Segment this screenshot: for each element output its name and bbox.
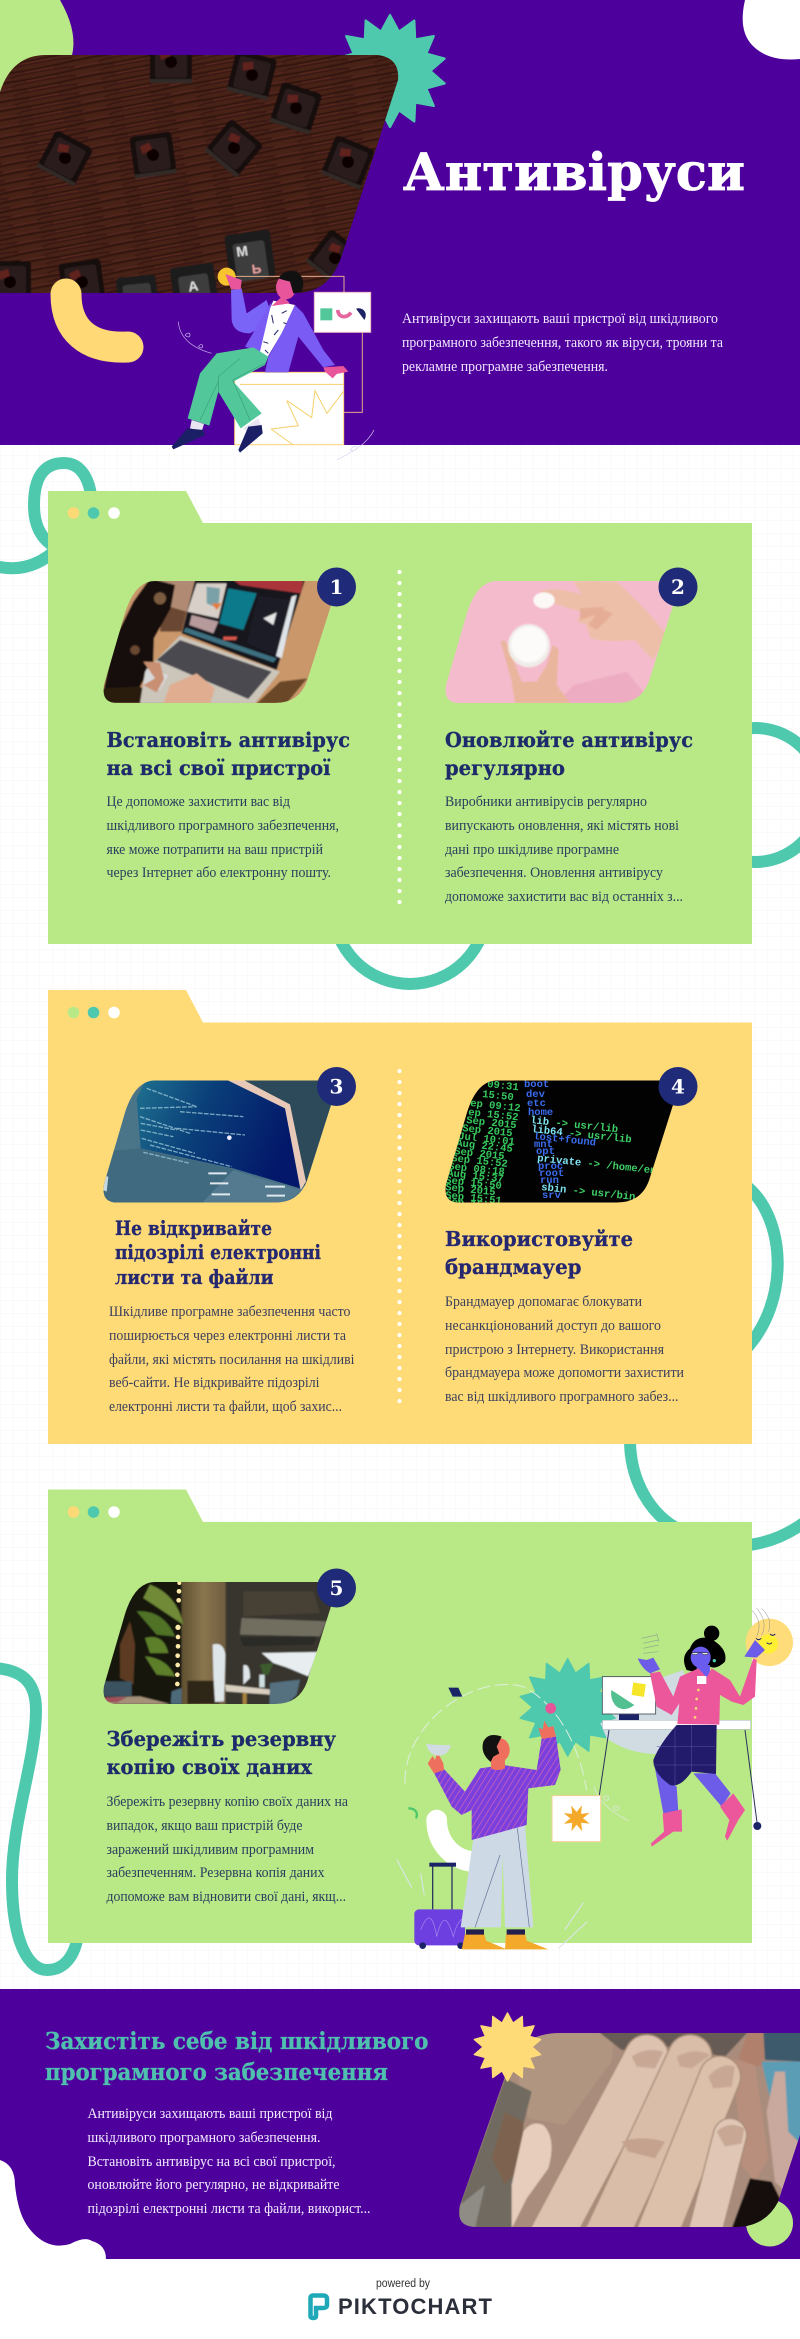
footer text: оновлюйте його регулярно, не відкривайте <box>88 2177 340 2193</box>
intro text <box>402 311 723 375</box>
photo: terminal: Sep 15:30 <box>445 1196 502 1214</box>
badge 3 <box>317 1067 356 1106</box>
text 2 <box>445 794 683 905</box>
star <box>520 1659 615 1756</box>
footer heading: Захистіть себе від шкідливого <box>45 2028 428 2055</box>
photo: laptop <box>100 578 340 705</box>
text 2: допоможе захистити вас від останніх з... <box>445 889 683 905</box>
badge 2 <box>658 568 698 606</box>
photo: hand on face <box>455 2032 800 2238</box>
window dots <box>68 507 120 519</box>
icon: teal star <box>335 15 445 127</box>
heading 3: листи та файли <box>115 1266 274 1289</box>
heading 3 <box>115 1217 321 1289</box>
heading 1 <box>106 728 350 780</box>
text 1: Це допоможе захистити вас від <box>106 794 290 810</box>
decorative teal rings <box>0 463 800 1970</box>
text 2: Виробники антивірусів регулярно <box>445 794 647 810</box>
illustration: two people at desk <box>397 1608 793 1949</box>
badge 4: 4 <box>671 1074 685 1098</box>
photo: terminal: root <box>539 1168 564 1180</box>
heading 1: на всі свої пристрої <box>106 756 331 780</box>
photo: terminal: run <box>540 1175 559 1187</box>
photo: terminal: dev <box>526 1089 546 1101</box>
heading 2: регулярно <box>445 756 565 780</box>
picture card <box>552 1796 601 1842</box>
woman <box>638 1626 765 1847</box>
photo: terminal: mnt <box>534 1139 553 1151</box>
motion lines <box>397 1859 587 1948</box>
heading 4 <box>445 1227 633 1279</box>
photo: terminal: Sep 2015 <box>466 1115 517 1132</box>
badge 1 <box>317 568 356 606</box>
head <box>272 292 290 306</box>
photo: terminal: lib64 -> usr/lib <box>531 1124 632 1147</box>
footer heading <box>45 2028 428 2086</box>
photo: terminal: home <box>528 1107 553 1119</box>
icon: yellow star <box>474 2013 541 2081</box>
photo: terminal: opt <box>536 1146 555 1158</box>
white footer strip <box>0 2259 800 2339</box>
heading 2: Оновлюйте антивірус <box>445 728 693 752</box>
intro text: рекламне програмне забезпечення. <box>402 359 608 375</box>
dashed arc <box>405 1684 587 1790</box>
text 5 <box>106 1794 348 1905</box>
footer banner <box>0 1989 800 2259</box>
photo: terminal: etc <box>527 1098 546 1110</box>
heading 5: Збережіть резервну <box>106 1727 336 1751</box>
card 2 <box>48 990 752 1444</box>
badge 5: 5 <box>330 1576 343 1600</box>
monitor and desk <box>599 1677 761 1830</box>
heading 3: підозрілі електронні <box>115 1241 321 1264</box>
photo: code screen <box>100 1078 340 1205</box>
photo: terminal: Sep 15:52 <box>451 1153 508 1171</box>
grey blob <box>583 1670 690 1754</box>
powered by label: powered by <box>376 2278 430 2290</box>
photo: terminal: ep 09:12 <box>470 1098 521 1115</box>
text 2: забезпечення. Оновлення антивірусу <box>445 865 663 881</box>
photo: terminal: 15:50 <box>482 1089 514 1104</box>
jacket <box>245 302 335 372</box>
arm <box>231 288 273 333</box>
heading 1: Встановіть антивірус <box>106 728 350 752</box>
window dots <box>68 1007 120 1018</box>
photo: terminal: ep 15:52 <box>468 1107 519 1124</box>
footer text: шкідливого програмного забезпечення. <box>88 2130 320 2146</box>
icon: piktochart logo <box>310 2296 327 2318</box>
text 3 <box>109 1304 354 1415</box>
title: Антивіруси <box>403 143 745 203</box>
window dots <box>68 1506 120 1518</box>
socks and shoes <box>190 418 261 433</box>
text 3: файли, які містять посилання на шкідливі <box>109 1352 354 1368</box>
photo: terminal <box>446 1080 673 1202</box>
photo: terminal: private -> /home/encr <box>537 1153 669 1179</box>
card 1 <box>48 491 752 944</box>
text 4: вас від шкідливого програмного забез... <box>445 1389 678 1405</box>
text 3: Шкідливе програмне забезпечення часто <box>109 1304 350 1320</box>
man <box>426 1703 561 1949</box>
footer text: Антивіруси захищають ваші пристрої від <box>88 2106 333 2122</box>
text 4: пристрою з Інтернету. Використання <box>445 1342 664 1358</box>
text 3: веб-сайти. Не відкривайте підозрілі <box>109 1375 320 1391</box>
badge 2: 2 <box>671 575 685 599</box>
badge 1: 1 <box>330 575 343 599</box>
text 5: заражений шкідливим програмним <box>106 1842 314 1858</box>
photo: terminal: Sep 15:50 <box>445 1175 502 1193</box>
photo: terminal: boot <box>524 1079 549 1091</box>
yellow C shape <box>66 294 128 347</box>
connector lines <box>233 276 362 412</box>
photo: terminal: srv <box>542 1190 562 1202</box>
sign card <box>314 292 371 332</box>
heading 3: Не відкривайте <box>115 1217 272 1240</box>
heading 4: Використовуйте <box>445 1227 633 1251</box>
white box <box>235 372 344 445</box>
blob: green top left <box>0 0 73 100</box>
photo: terminal: proc <box>538 1161 563 1173</box>
badge 5 <box>317 1568 356 1608</box>
intro text: програмного забезпечення, такого як віруси, трояни та <box>402 335 723 351</box>
heading 2 <box>445 728 693 780</box>
heading 5: копію своїх даних <box>106 1755 313 1779</box>
text 3: електронні листи та файли, щоб захис... <box>109 1399 342 1415</box>
photo: terminal: lost+found <box>533 1131 597 1150</box>
photo: terminal: Aug 15:37 <box>447 1168 504 1186</box>
photo: keyboard keys on wood: M <box>235 242 249 260</box>
text 4 <box>445 1294 684 1405</box>
heading 5 <box>106 1727 336 1779</box>
text 3: поширюється через електронні листи та <box>109 1328 346 1344</box>
suitcase <box>414 1863 465 1949</box>
photo: terminal: Sep 15:51 <box>445 1190 502 1208</box>
text 5: випадок, якщо ваш пристрій буде <box>106 1818 303 1834</box>
badge 4 <box>658 1067 698 1106</box>
badge 3: 3 <box>330 1074 343 1098</box>
intro text: Антивіруси захищають ваші пристрої від шкідливого <box>402 311 718 327</box>
smiling sun <box>746 1608 793 1666</box>
card 3 <box>48 1490 752 1943</box>
squiggles <box>178 322 212 353</box>
photo: terminal: Aug 22:45 <box>456 1138 513 1156</box>
footer text: підозрілі електронні листи та файли, використ... <box>88 2201 370 2217</box>
photo: terminal: Sep 2015 <box>454 1146 505 1163</box>
heading 4: брандмауер <box>445 1255 582 1279</box>
photo: terminal: Sep 2015 <box>445 1182 496 1199</box>
footer text <box>88 2106 370 2217</box>
dotted divider <box>398 572 402 904</box>
photo: terminal: Sep 2015 <box>462 1123 513 1140</box>
text 1: яке може потрапити на ваш пристрій <box>106 842 323 858</box>
green circle <box>746 2200 793 2246</box>
text 4: Брандмауер допомагає блокувати <box>445 1294 642 1310</box>
text 4: брандмауера може допомогти захистити <box>445 1365 684 1381</box>
text 2: випускають оновлення, які містять нові <box>445 818 679 834</box>
text 5: Збережіть резервну копію своїх даних на <box>106 1794 348 1810</box>
yellow coin <box>218 268 236 286</box>
photo: terminal: lib -> usr/lib <box>530 1115 619 1136</box>
diamond <box>448 1688 462 1697</box>
text 5: забезпеченням. Резервна копія даних <box>106 1865 325 1881</box>
green arc <box>408 1808 417 1818</box>
photo: keyboard keys on wood: A <box>187 277 199 295</box>
blob: white top right <box>743 0 800 59</box>
text 1 <box>106 794 339 881</box>
trousers <box>188 347 268 428</box>
header banner <box>0 0 800 445</box>
footer text: Встановіть антивірус на всі свої пристрої, <box>88 2154 336 2170</box>
white C blob <box>437 1820 473 1862</box>
photo: keyboard keys on wood <box>0 55 398 293</box>
text 2: дані про шкідливе програмне <box>445 842 619 858</box>
piktochart wordmark: PIKTOCHART <box>338 2294 493 2319</box>
photo: terminal: Jul 10:01 <box>458 1131 515 1149</box>
photo: cream <box>440 578 680 705</box>
text 1: через Інтернет або електронну пошту. <box>106 865 331 881</box>
hand on box <box>323 366 348 378</box>
white blob bottom left <box>0 2160 106 2259</box>
text 1: шкідливого програмного забезпечення, <box>106 818 339 834</box>
text 4: несанкціонований доступ до вашого <box>445 1318 661 1334</box>
footer heading: програмного забезпечення <box>45 2059 388 2086</box>
shirt <box>253 301 295 357</box>
dotted divider <box>398 1071 402 1403</box>
photo: keyboard keys on wood: Ь <box>251 261 262 277</box>
text 5: допоможе вам відновити свої дані, якщ... <box>106 1889 346 1905</box>
illustration: man sitting on box <box>172 268 374 460</box>
photo: terminal: sbin -> usr/bin <box>541 1182 636 1204</box>
photo: terminal: 09:31 <box>487 1079 519 1094</box>
photo: terminal: Sep 08:18 <box>448 1161 505 1179</box>
photo: cafe interior <box>100 1580 340 1708</box>
